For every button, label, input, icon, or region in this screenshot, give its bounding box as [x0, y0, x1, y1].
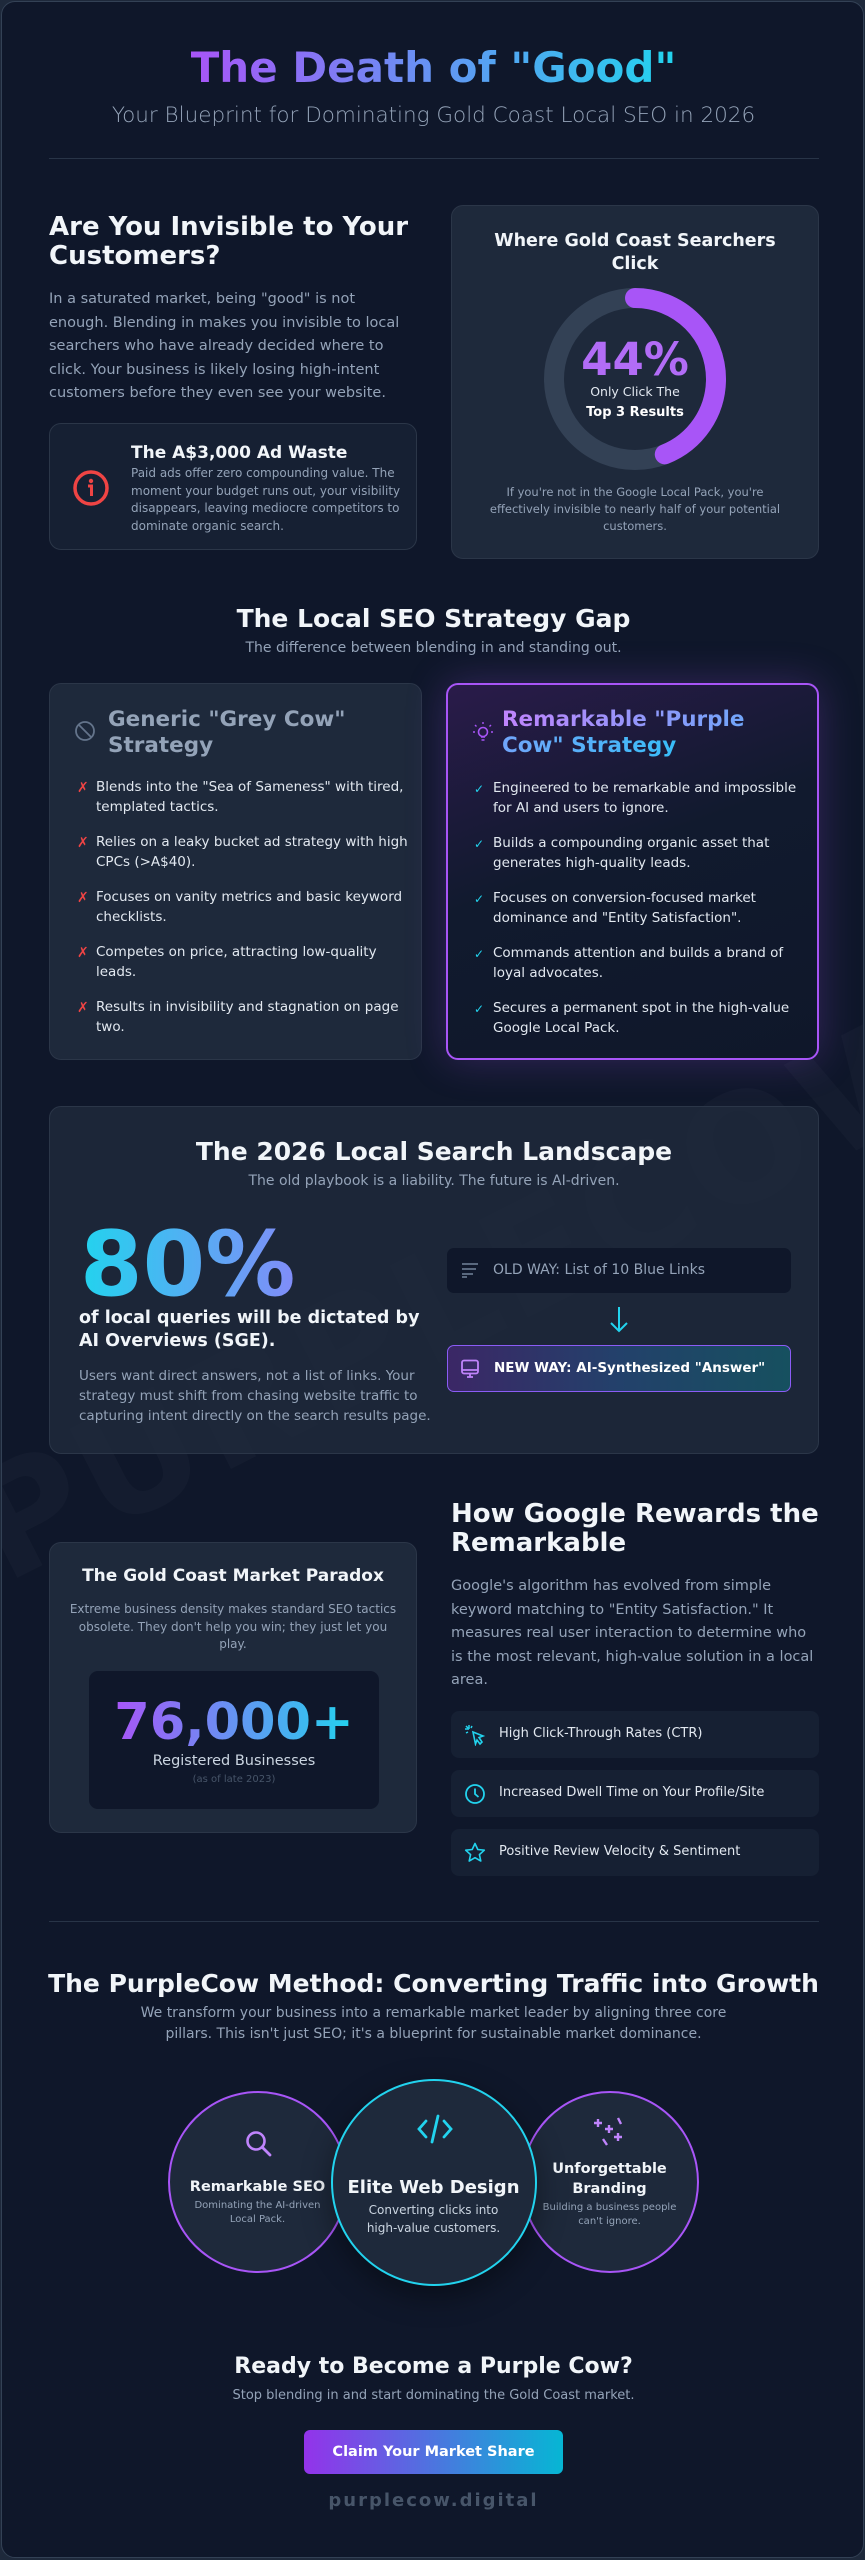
- panel: purple cow: ✓: [474, 892, 484, 906]
- callout: ad waste: The A$3,000 Ad Waste: [131, 443, 347, 463]
- stat: 76,000+: Registered Businesses: [153, 1753, 315, 1769]
- panel: purple cow: ✓: [474, 947, 484, 961]
- new way box: NEW WAY: AI-Synthesized "Answer": [494, 1360, 765, 1376]
- panel: grey cow: ✗: [77, 835, 89, 851]
- panel: landscape: of local queries will be dictated by AI Overviews (SGE).: [79, 1308, 420, 1351]
- panel: landscape: The old playbook is a liability. The future is AI-driven.: [248, 1173, 620, 1189]
- panel: donut chart: Top 3 Results: [586, 405, 684, 420]
- panel: donut chart: Only Click The: [590, 384, 680, 399]
- panel: grey cow: [49, 683, 422, 1060]
- row: dwell: Increased Dwell Time on Your Profile/Site: [499, 1785, 764, 1800]
- panel: donut chart: 44%: [581, 333, 689, 386]
- button: [304, 2430, 563, 2474]
- panel: purple cow: Engineered to be remarkable and impossible for AI and users to ignore.: [493, 780, 796, 816]
- circle: branding: [521, 2091, 699, 2273]
- panel: grey cow: Strategy: [108, 733, 213, 758]
- icon: ban: [75, 721, 95, 741]
- panel: purple cow: Remarkable "Purple: [502, 707, 744, 732]
- text: The difference between blending in and standing out.: [245, 640, 622, 656]
- footer: purplecow.digital: [328, 2490, 539, 2511]
- panel: market paradox: The Gold Coast Market Paradox: [82, 1566, 384, 1586]
- panel: donut chart: Click: [612, 254, 658, 274]
- arrow: [610, 1307, 628, 1332]
- panel: grey cow: ✗: [77, 945, 89, 961]
- old way box: OLD WAY: List of 10 Blue Links: [493, 1262, 705, 1278]
- circle: web design: Elite Web Design: [347, 2177, 520, 2198]
- row: CTR: High Click-Through Rates (CTR): [499, 1726, 702, 1741]
- panel: donut chart: [451, 205, 819, 559]
- panel: purple cow: ✓: [474, 782, 484, 796]
- text: Google's algorithm has evolved from simple keyword matching to "Entity Satisfaction." It measures real user interaction to determine who is the most relevant, high-value solution in a local area.: [451, 1578, 813, 1688]
- panel: donut chart: If you're not in the Google Local Pack, you're effectively invisible to nearly half of your potential customers.: [490, 485, 780, 533]
- panel: purple cow: Builds a compounding organic asset that generates high-quality leads.: [493, 835, 769, 871]
- circle: branding: Building a business people can't ignore.: [543, 2202, 676, 2227]
- panel: grey cow: ✗: [77, 780, 89, 796]
- panel: purple cow: Commands attention and builds a brand of loyal advocates.: [493, 945, 783, 981]
- button: Claim Your Market Share: [332, 2444, 535, 2460]
- circle: SEO: [168, 2091, 348, 2273]
- donut: [544, 288, 726, 470]
- panel: grey cow: ✗: [77, 1000, 89, 1016]
- heading: invisible: Are You Invisible to Your Customers?: [49, 212, 408, 271]
- row: reviews: [451, 1829, 819, 1876]
- panel: purple cow: ✓: [474, 1002, 484, 1016]
- paragraph: invisible: In a saturated market, being "good" is not enough. Blending in makes you invisible to local searchers who have already decided where to click. Your business is likely losing high-intent customers before they even see your website.: [49, 291, 399, 401]
- panel: donut chart: Where Gold Coast Searchers: [494, 231, 776, 251]
- stat: 76,000+: [89, 1671, 379, 1809]
- panel: purple cow: Focuses on conversion-focused market dominance and "Entity Satisfaction".: [493, 890, 756, 926]
- circle: SEO: Remarkable SEO: [190, 2179, 325, 2195]
- panel: grey cow: Competes on price, attracting low-quality leads.: [96, 944, 377, 980]
- callout: ad waste: Paid ads offer zero compounding value. The moment your budget runs out, your visibility disappears, leaving mediocre competitors to dominate organic search.: [131, 466, 400, 532]
- stat: 80%: 80%: [80, 1212, 295, 1317]
- heading: CTA: Ready to Become a Purple Cow?: [234, 2354, 633, 2379]
- circle: SEO: Dominating the AI-driven Local Pack.: [194, 2200, 320, 2225]
- circle: web design: [331, 2079, 537, 2286]
- panel: grey cow: Blends into the "Sea of Sameness" with tired, templated tactics.: [96, 779, 403, 815]
- icon: info: [73, 470, 109, 506]
- panel: landscape: [49, 1106, 819, 1454]
- circle: branding: Branding: [572, 2181, 647, 2197]
- circle: branding: Unforgettable: [552, 2161, 667, 2177]
- new way box: [447, 1345, 791, 1392]
- stat: 76,000+: 76,000+: [114, 1693, 354, 1752]
- heading: method: The PurpleCow Method: Converting Traffic into Growth: [48, 1969, 819, 1998]
- row: dwell: [451, 1770, 819, 1817]
- stat: 76,000+: (as of late 2023): [193, 1774, 275, 1785]
- icon: lightbulb: [473, 722, 493, 741]
- panel: landscape: The 2026 Local Search Landscape: [196, 1137, 672, 1166]
- callout: ad waste: [49, 423, 417, 550]
- text: Stop blending in and start dominating the Gold Coast market.: [232, 2388, 635, 2403]
- panel: purple cow: [446, 683, 819, 1060]
- heading: strategy gap: The Local SEO Strategy Gap: [237, 604, 630, 633]
- panel: purple cow: Secures a permanent spot in the high-value Google Local Pack.: [493, 1000, 789, 1036]
- row: CTR: [451, 1711, 819, 1758]
- panel: grey cow: ✗: [77, 890, 89, 906]
- heading: how google rewards: How Google Rewards the Remarkable: [451, 1499, 819, 1558]
- circle: web design: Converting clicks into high-value customers.: [367, 2203, 500, 2235]
- title: The Death of "Good": [191, 43, 676, 92]
- old way box: [447, 1248, 791, 1293]
- panel: market paradox: [49, 1542, 417, 1833]
- panel: landscape: Users want direct answers, not a list of links. Your strategy must shift from chasing website traffic to capturing intent directly on the search results page.: [79, 1368, 431, 1424]
- text: We transform your business into a remarkable market leader by aligning three core pillars. This isn't just SEO; it's a blueprint for sustainable market dominance.: [141, 2005, 726, 2042]
- panel: grey cow: Relies on a leaky bucket ad strategy with high CPCs (>A$40).: [96, 834, 408, 870]
- row: reviews: Positive Review Velocity & Sentiment: [499, 1844, 740, 1859]
- panel: grey cow: Results in invisibility and stagnation on page two.: [96, 999, 399, 1035]
- panel: grey cow: Focuses on vanity metrics and basic keyword checklists.: [96, 889, 402, 925]
- panel: grey cow: Generic "Grey Cow": [108, 707, 345, 732]
- panel: purple cow: Cow" Strategy: [502, 733, 676, 758]
- panel: purple cow: ✓: [474, 837, 484, 851]
- subtitle: Your Blueprint for Dominating Gold Coast Local SEO in 2026: [112, 103, 755, 128]
- panel: market paradox: Extreme business density makes standard SEO tactics obsolete. They don't help you win; they just let you play.: [70, 1602, 396, 1651]
